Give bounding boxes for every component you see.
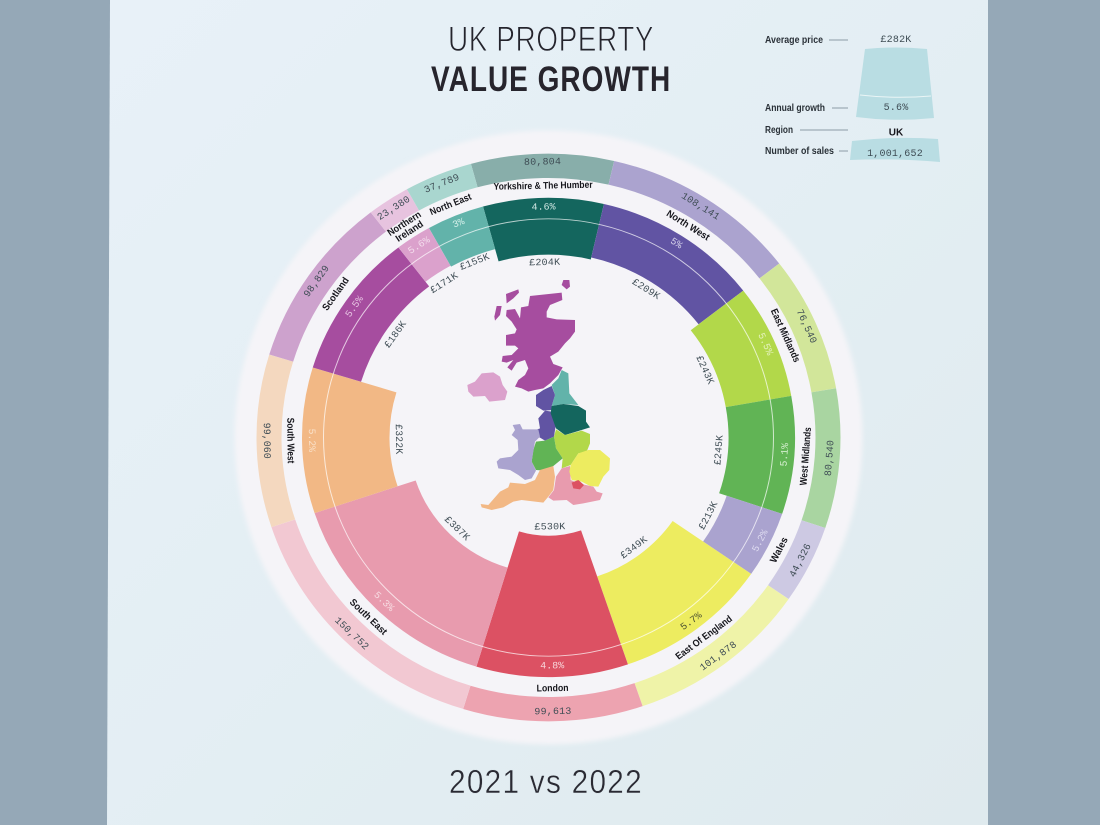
segment: North East: 3%: [451, 216, 466, 231]
legend values: 5.6%: [884, 103, 908, 114]
legend labels: Number of sales: [765, 146, 834, 157]
map: London: [572, 480, 584, 489]
segment: West Midlands: 80,540: [823, 440, 837, 476]
segment: North East: 37,789: [423, 172, 461, 196]
segment: South East: 5.3%: [371, 590, 396, 614]
segment: North East: North East: [428, 192, 474, 218]
segment: Yorkshire and The Humber: 80,804: [524, 156, 561, 168]
segment: East Midlands: £243K: [693, 354, 716, 386]
legend labels: Annual growth: [765, 103, 825, 114]
segment: South West: [195, 94, 902, 781]
segment: South West: South West: [284, 418, 296, 464]
segment: West Midlands: 5.1%: [778, 443, 791, 467]
segment: East Of England: 5.7%: [678, 610, 704, 633]
segment: East Of England: 101,878: [698, 639, 739, 673]
segment: Wales: £213K: [697, 500, 720, 531]
segment: North East: [169, 68, 928, 807]
segment: Scotland: 98,829: [302, 263, 332, 299]
title: [431, 19, 670, 99]
segment: Northern Ireland: 23,380: [375, 194, 412, 223]
legend: [765, 35, 940, 162]
segment: North West: £209K: [630, 277, 662, 302]
map: North East: [552, 370, 578, 406]
segment: London: 99,613: [534, 706, 572, 717]
segment: Northern Ireland: 5.6%: [406, 235, 432, 257]
segment: East Of England: [160, 59, 937, 816]
map: Northern Ireland: [467, 372, 507, 402]
map: Wales: [497, 424, 540, 480]
segment: Northern Ireland: [157, 57, 940, 818]
segment: London: [194, 93, 903, 782]
segment: East Midlands: 76,540: [794, 308, 819, 345]
title: UK PROPERTY: [448, 19, 654, 59]
segment: North West: North West: [664, 208, 712, 244]
title: VALUE GROWTH: [431, 59, 670, 99]
disc halo: [234, 130, 862, 744]
segment: Wales: Wales: [768, 535, 791, 565]
segment: West Midlands: £245K: [712, 435, 726, 465]
segment: East Midlands: East Midlands: [768, 307, 802, 365]
segment: West Midlands: West Midlands: [798, 426, 814, 486]
segment: East Midlands: [156, 56, 941, 819]
segment: Yorkshire and The Humber: 4.6%: [531, 202, 556, 213]
segment: Yorkshire and The Humber: £204K: [529, 257, 560, 268]
legend values: UK: [889, 128, 904, 138]
footer years: 2021 vs 2022: [449, 764, 642, 800]
segment: South East: South East: [347, 597, 390, 638]
segment: Northern Ireland: Northern: [386, 209, 424, 239]
legend labels: Region: [765, 125, 793, 136]
legend labels: [765, 35, 848, 157]
segment: Northern Ireland: £171K: [428, 270, 460, 296]
segment: North West: 5%: [668, 236, 684, 251]
segment: Scotland: £186K: [382, 319, 409, 350]
map: Scotland: [494, 280, 575, 392]
reference ring: [324, 219, 774, 656]
segment: South East: [199, 98, 898, 777]
segment: London: £530K: [534, 521, 566, 533]
segment: London: London: [536, 683, 569, 694]
map: South East: [548, 466, 603, 505]
map: Yorkshire and The Humber: [551, 404, 590, 435]
segment: North West: 108,141: [679, 191, 722, 223]
segment: South East: £387K: [442, 514, 472, 543]
segment: South West: £322K: [393, 424, 404, 454]
segment: East Of England: £349K: [618, 534, 650, 561]
legend values: 1,001,652: [867, 149, 923, 160]
segment: Wales: 44,326: [787, 542, 814, 579]
legend values: £282K: [880, 35, 912, 46]
radial chart: [156, 56, 941, 819]
map: East Midlands: [554, 429, 590, 468]
segment: Yorkshire and The Humber: Yorkshire & The Humber: [493, 180, 593, 193]
map: East Of England: [569, 450, 610, 487]
segment: Scotland: 5.5%: [343, 294, 366, 319]
legend labels: Average price: [765, 35, 823, 46]
legend key shapes: [850, 48, 940, 162]
segment: Scotland: [199, 98, 898, 777]
segment: South East: 150,752: [332, 615, 371, 652]
segment: Northern Ireland: Ireland: [394, 219, 426, 245]
segment: South West: 5.2%: [306, 429, 317, 452]
segment: Wales: 5.2%: [750, 528, 771, 554]
map: West Midlands: [532, 437, 563, 471]
segment: Wales: [194, 93, 903, 782]
segment: West Midlands: [225, 123, 872, 752]
legend values: [867, 35, 923, 160]
segment: East Midlands: 5.5%: [755, 331, 775, 357]
segment: North East: £155K: [458, 251, 491, 273]
segment: East Of England: East Of England: [674, 614, 735, 662]
map: South West: [481, 466, 555, 510]
segment: Yorkshire and The Humber: [205, 103, 892, 772]
UK map: [467, 280, 610, 510]
segment: Scotland: Scotland: [320, 276, 352, 313]
map: North West: [536, 386, 556, 441]
segment: North West: [213, 112, 884, 763]
segment: South West: 99,060: [261, 423, 272, 459]
segment: London: 4.8%: [540, 660, 564, 671]
